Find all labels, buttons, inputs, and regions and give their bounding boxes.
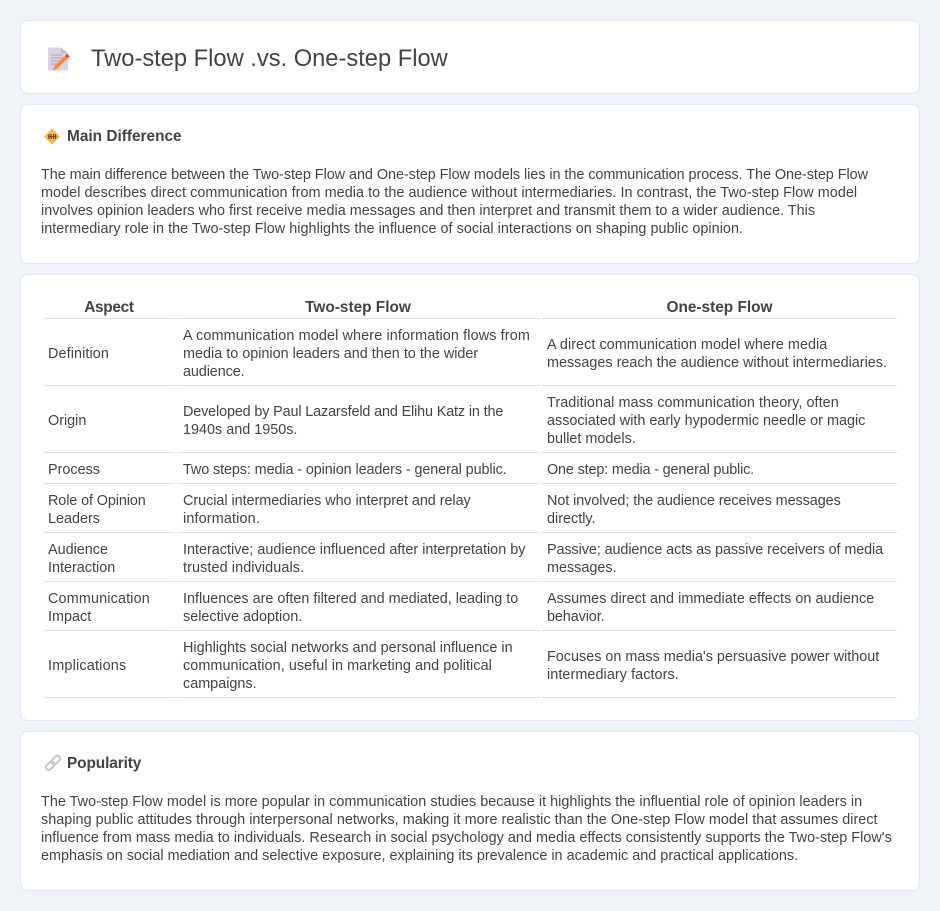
panel: comparison table <box>20 274 920 721</box>
cell: definition two-step: media to opinion leaders and then to the wider <box>183 346 478 362</box>
row: audience interaction: Audience <box>48 542 108 558</box>
cell: definition one-step: messages reach the audience without intermediaries. <box>547 355 887 371</box>
cell: audience one-step: messages. <box>547 560 617 576</box>
cell: role two-step <box>183 493 471 527</box>
row: communication impact <box>48 591 150 625</box>
header: one-step flow: One-step Flow <box>666 299 773 316</box>
text block: main difference <box>41 167 868 237</box>
cell: origin two-step: Developed by Paul Lazarsfeld and Elihu Katz in the <box>183 404 503 420</box>
row: origin: Origin <box>48 413 86 429</box>
row: communication impact: Communication <box>48 591 150 607</box>
cell: role two-step: Crucial intermediaries who interpret and relay <box>183 493 471 509</box>
panel: main difference <box>20 104 920 264</box>
cell: definition two-step <box>183 328 530 380</box>
cell: origin one-step: Traditional mass communication theory, often <box>547 395 839 411</box>
cell: role one-step: Not involved; the audience receives messages <box>547 493 841 509</box>
row: role of opinion leaders: Leaders <box>48 511 100 527</box>
row: implications: Implications <box>48 658 126 674</box>
icon: document with pencil <box>48 48 70 70</box>
cell: implications one-step: Focuses on mass media's persuasive power without <box>547 649 879 665</box>
cell: origin one-step: bullet models. <box>547 431 636 447</box>
cell: origin two-step: 1940s and 1950s. <box>183 422 297 438</box>
cell: impact one-step: Assumes direct and immediate effects on audience <box>547 591 874 607</box>
row: audience interaction <box>48 542 115 576</box>
text block: popularity: emphasis on social mediation and selective exposure, explaining its prevalence in academic and practical applications. <box>41 848 798 864</box>
cell: definition one-step <box>547 337 887 371</box>
text block: main difference: model describes direct communication from media to the audience without intermediaries. In contrast, the Two-step Flow model <box>41 185 857 201</box>
cell: implications two-step: communication, useful in marketing and political <box>183 658 492 674</box>
cell: origin one-step <box>547 395 865 447</box>
row: process: Process <box>48 462 100 478</box>
cell: implications one-step <box>547 649 880 683</box>
cell: implications one-step: intermediary factors. <box>547 667 679 683</box>
cell: audience two-step: Interactive; audience influenced after interpretation by <box>183 542 525 558</box>
icon: chain link <box>44 754 62 772</box>
row: role of opinion leaders <box>48 493 146 527</box>
cell: definition one-step: A direct communication model where media <box>547 337 827 353</box>
cell: impact two-step: selective adoption. <box>183 609 302 625</box>
cell: definition two-step: A communication model where information flows from <box>183 328 530 344</box>
text block: popularity <box>41 794 892 864</box>
header: two-step flow: Two-step Flow <box>305 299 411 316</box>
heading: main difference: Main Difference <box>67 128 182 145</box>
row: audience interaction: Interaction <box>48 560 115 576</box>
text block: main difference: The main difference between the Two-step Flow and One-step Flow models lies in the communication process. The One-step Flow <box>41 167 868 183</box>
cell: role one-step <box>547 493 841 527</box>
text block: popularity: The Two-step Flow model is more popular in communication studies because it highlights the influential role of opinion leaders in <box>41 794 862 810</box>
cell: impact one-step: behavior. <box>547 609 605 625</box>
cell: impact one-step <box>547 591 874 625</box>
cell: audience one-step <box>547 542 884 576</box>
row: communication impact: Impact <box>48 609 91 625</box>
cell: implications two-step <box>183 640 513 692</box>
cell: process two-step: Two steps: media - opinion leaders - general public. <box>183 462 507 478</box>
title: Two-step Flow .vs. One-step Flow <box>91 46 448 72</box>
cell: audience two-step <box>183 542 526 576</box>
heading: popularity: Popularity <box>67 755 141 772</box>
text block: main difference: intermediary role in the Two-step Flow highlights the influence of social interactions on shaping public opinion. <box>41 221 743 237</box>
cell: role one-step: directly. <box>547 511 596 527</box>
cell: origin two-step <box>183 404 503 438</box>
table header <box>84 299 773 316</box>
text block: popularity: influence from mass media to individuals. Research in social psychology and media effects consistently supports the Two-step Flow's <box>41 830 892 846</box>
cell: audience one-step: Passive; audience acts as passive receivers of media <box>547 542 883 558</box>
cell: impact two-step <box>183 591 518 625</box>
panel: popularity <box>20 731 920 891</box>
icon: warning diamond <box>44 128 60 144</box>
text block: main difference: involves opinion leaders who first receive media messages and then interpret and transmit them to a wider audience. This <box>41 203 815 219</box>
row: definition: Definition <box>48 346 109 362</box>
cell: implications two-step: Highlights social networks and personal influence in <box>183 640 513 656</box>
cell: origin one-step: associated with early hypodermic needle or magic <box>547 413 865 429</box>
panel: title card <box>20 20 920 94</box>
cell: implications two-step: campaigns. <box>183 676 257 692</box>
row: role of opinion leaders: Role of Opinion <box>48 493 146 509</box>
cell: role two-step: information. <box>183 511 260 527</box>
text block: popularity: shaping public attitudes through interpersonal networks, making it more realistic than the One-step Flow model that assumes direct <box>41 812 878 828</box>
cell: audience two-step: trusted individuals. <box>183 560 304 576</box>
header: aspect: Aspect <box>84 299 134 316</box>
cell: definition two-step: audience. <box>183 364 245 380</box>
cell: impact two-step: Influences are often filtered and mediated, leading to <box>183 591 518 607</box>
cell: process one-step: One step: media - general public. <box>547 462 754 478</box>
